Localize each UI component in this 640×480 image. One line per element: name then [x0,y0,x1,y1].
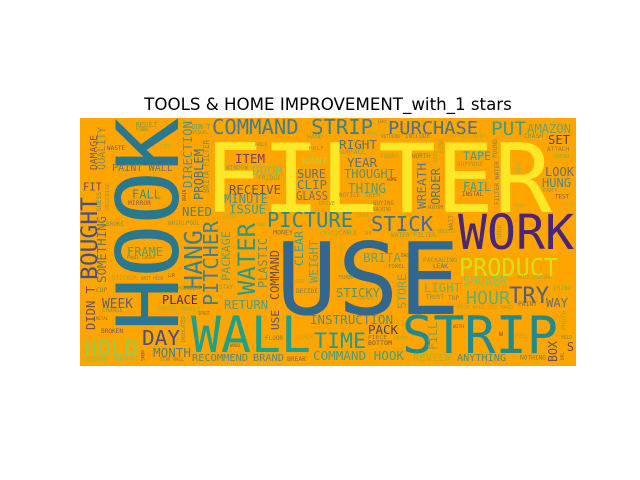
tiny words: MONEY [273,230,293,236]
word: PITCHER: PITCHER [199,220,223,306]
minor words: DIRECTION [180,121,195,188]
tiny words: LEAK [433,263,448,270]
minor words: DIDN T [84,286,98,330]
tiny words: PART [543,188,558,194]
minor words: MONTH [153,346,191,360]
tiny words: STICKER [112,275,137,282]
tiny words: HALF [309,146,324,152]
tiny words: GOOD [497,225,503,239]
word: PUT: PUT [491,118,526,140]
tiny words: PHOTO [561,311,568,330]
word: TIME: TIME [314,329,366,353]
tiny words: NOTICE [339,192,360,199]
tiny words: CRASH [524,133,543,140]
minor words: SHOWER [463,274,508,288]
tiny words: BAG [401,253,409,259]
tiny words: DRY [516,162,523,173]
tiny words: WHITE VINEGAR [517,275,551,281]
tiny words: SUPPOSE [457,161,483,168]
tiny words: FILTER WATER [493,161,501,205]
minor words: SOMETHING [95,216,109,283]
tiny words: HOME [387,177,397,183]
tiny words: ATTACH [547,146,569,153]
title: TOOLS & HOME IMPROVEMENT_with_1 stars [143,95,512,115]
tiny words: LIFT [160,144,171,150]
word: HANG: HANG [179,230,208,290]
minor words: ISSUE [229,202,266,216]
tiny words: POUND [492,139,499,158]
tiny words: STEP [295,279,305,285]
tiny words: TEST [555,194,569,200]
tiny words: DRIVE [319,201,335,207]
minor words: PACKAGE [219,231,233,281]
minor words: PAINT WALL [112,163,173,174]
tiny words: VISUAL [192,130,208,136]
word: HOOK: HOOK [99,118,199,331]
minor words: RIGHT [339,138,377,152]
tiny words: CABLE [339,230,357,236]
tiny words: PRICE [255,142,267,148]
word: PICTURE: PICTURE [267,208,353,232]
tiny words: WINDOW [226,164,248,172]
tiny words: TOP [448,295,459,302]
tiny words: USED [257,222,265,228]
minor words: COMMAND [268,250,282,300]
tiny words: WITH [453,324,464,330]
word: HOLD: HOLD [84,337,138,362]
minor words: MINUTE [224,192,268,206]
tiny words: WAIT HIGH [141,276,163,282]
tiny words: SURFACE [339,149,365,156]
tiny words: PURPOSE [357,296,374,302]
minor words: BRITA [363,251,402,265]
word: WATER: WATER [233,222,261,295]
tiny words: CREEP [223,214,237,220]
word: FILTER: FILTER [204,125,553,235]
word: DAY: DAY [142,326,180,350]
minor words: WAY [546,296,569,310]
minor words: LOOK [545,165,575,179]
major words [78,115,574,366]
word: PRODUCT: PRODUCT [459,253,558,282]
word: STRIP: STRIP [402,306,558,366]
tiny words: BABY [514,203,525,209]
tiny words: TODAY [380,153,398,160]
tiny words: LR [168,273,176,279]
tiny words: FOUND [136,127,148,133]
tiny words: WATER FILTER [391,232,436,239]
tiny words: WOOD [230,343,240,349]
word: WALL: WALL [191,306,311,364]
minor words: WANT [302,156,328,167]
tiny words: PITCHER PANTS [339,243,345,270]
tiny words: INCLUDE [405,133,430,140]
minor words: WEIGHT [307,240,321,283]
tiny words: STOCK [357,213,369,219]
tiny words: W [499,331,503,338]
minor words: FALL [132,188,161,202]
tiny words: METAL [96,316,108,322]
tiny words [83,119,573,363]
minor words: THING [348,182,386,197]
minor words: STORE [395,274,409,309]
minor words: COMMAND HOOK [313,348,404,363]
minor words: GLASS [296,189,328,203]
tiny words: STAY [219,284,233,291]
minor words: RETURN [224,298,268,312]
tiny words: DAY [378,119,387,125]
minor words: WEEK [102,297,133,312]
word: COMMAND STRIP: COMMAND STRIP [212,115,373,139]
minor words: ANYTHING [457,353,506,364]
panel: word cloud [78,115,576,366]
tiny words: SPOUT [198,311,210,317]
minor words: RECEIVE [229,183,281,197]
minor words: RECOMMEND [192,353,248,364]
tiny words: TRUST [426,294,444,301]
word: WORK: WORK [458,205,574,261]
tiny words: BREAK [287,356,306,363]
tiny words: PANEL CHEAP [127,255,155,261]
tiny words: THINK [553,285,571,292]
minor words: ORDER [429,167,443,205]
tiny words: CHANGE [102,307,123,314]
word: HOUR: HOUR [466,288,510,309]
minor words: PLACE [162,293,198,307]
tiny words: DRAIN [182,190,188,201]
tiny words: REFER [394,336,409,342]
minor words: ITEM [235,152,265,166]
tiny words: END [433,151,439,163]
tiny words: HAND [307,134,323,140]
tiny words: CUP [96,287,107,294]
minor words: FAIL [463,180,491,194]
tiny words: FLOOR [265,335,283,342]
tiny words: SHOP [140,349,146,361]
minor words: YEAR [347,156,378,170]
minor words: QUALITY [96,126,108,170]
word cloud background [80,118,576,366]
tiny words: BUSH WALL TRY HARD [457,305,513,311]
word: STICK: STICK [371,212,433,236]
minor words: HUNG [542,176,571,190]
tiny words: BROKEN [101,328,123,335]
tiny words: TURN [338,275,353,281]
minor words: USE [269,310,282,330]
minor words [83,121,575,364]
minor words: PLASTIC [256,238,270,288]
tiny words: WASTE MONEY [159,306,200,313]
minor words: PACK [368,323,399,337]
tiny words: HOLD [561,335,572,341]
minor words: DAMAGE [89,135,100,170]
word: USE: USE [276,221,460,338]
tiny words: BROKE [106,221,124,228]
tiny words: INSULATED [181,316,187,343]
tiny words: DESCRIBE [105,183,111,210]
minor words: REVIEW [413,353,452,364]
tiny words: OUTDOOR [381,134,401,140]
tiny words: PULL [515,333,529,340]
tiny words: TOWEL [388,264,406,270]
tiny words: FIND [438,139,445,153]
minor words: THOUGHT [344,167,395,181]
word: PURCHASE: PURCHASE [388,118,478,139]
minor words: BRAND [253,353,284,364]
minor words: AMAZON [527,122,571,136]
tiny words: INSTAL [462,191,483,198]
tiny words: DECIDE [296,288,318,295]
tiny words: PAINT [518,301,537,308]
word: TRY: TRY [509,284,549,309]
minor words: CLIP [297,178,327,192]
tiny words: CRACK [320,230,339,238]
tiny words: WANT [367,131,382,137]
tiny words: STAR WALL [160,357,184,363]
tiny words: SUPER [295,334,313,341]
word: BOUGHT: BOUGHT [78,197,103,280]
minor words: NEED [182,205,212,219]
tiny words: PIECE [368,335,387,341]
tiny words: HANGER [178,285,200,292]
tiny words: WAIT [448,215,455,230]
minor words: WREATH [414,163,429,209]
tiny words: MIRROR [128,199,151,207]
minor words: BOX [546,340,560,362]
minor words: DOOR [252,164,284,178]
minor words: STICKY [336,286,381,300]
minor words: FRAME [127,245,163,259]
tiny words: REPLACEMENT [447,133,487,140]
minor words: BRITA FILTER [202,140,211,193]
tiny words: WORTH [412,153,430,160]
tiny words: SHOW [554,154,570,160]
tiny words: RESULT [136,121,158,129]
minor words: SURE [297,167,326,181]
tiny words: LID [560,201,573,208]
tiny words: BOTTOM [368,340,392,347]
tiny words: ROOM [428,205,444,211]
minor words: TAPE [463,149,491,163]
tiny words: SEEM [365,193,381,199]
minor words: INSTRUCTION [310,312,393,327]
tiny words: DON T [192,123,211,131]
tiny words: WAL [560,352,566,360]
minor words: CLEAR [292,231,306,266]
tiny words: COMMAND PRODUCT [83,356,138,363]
minor words: LIGHT [424,281,461,295]
tiny words: VE [365,231,372,237]
tiny words: BUYING [373,200,394,207]
tiny words: FRIDGE [258,175,281,182]
tiny words: BACKING [373,207,391,213]
minor words: FIT [83,180,102,194]
tiny words: UNLESS [437,229,455,235]
tiny words: NOTHING [520,354,546,362]
minor words: FILL [426,322,440,350]
tiny words: WHIRLPOOL [168,220,200,227]
minor words: PROBLEM [192,149,206,200]
minor words: S [567,340,574,354]
tiny words: PACKAGING [423,256,457,264]
tiny words: WASTE [107,144,125,152]
tiny words: GUESS [96,192,103,211]
minor words: SET [548,133,570,147]
